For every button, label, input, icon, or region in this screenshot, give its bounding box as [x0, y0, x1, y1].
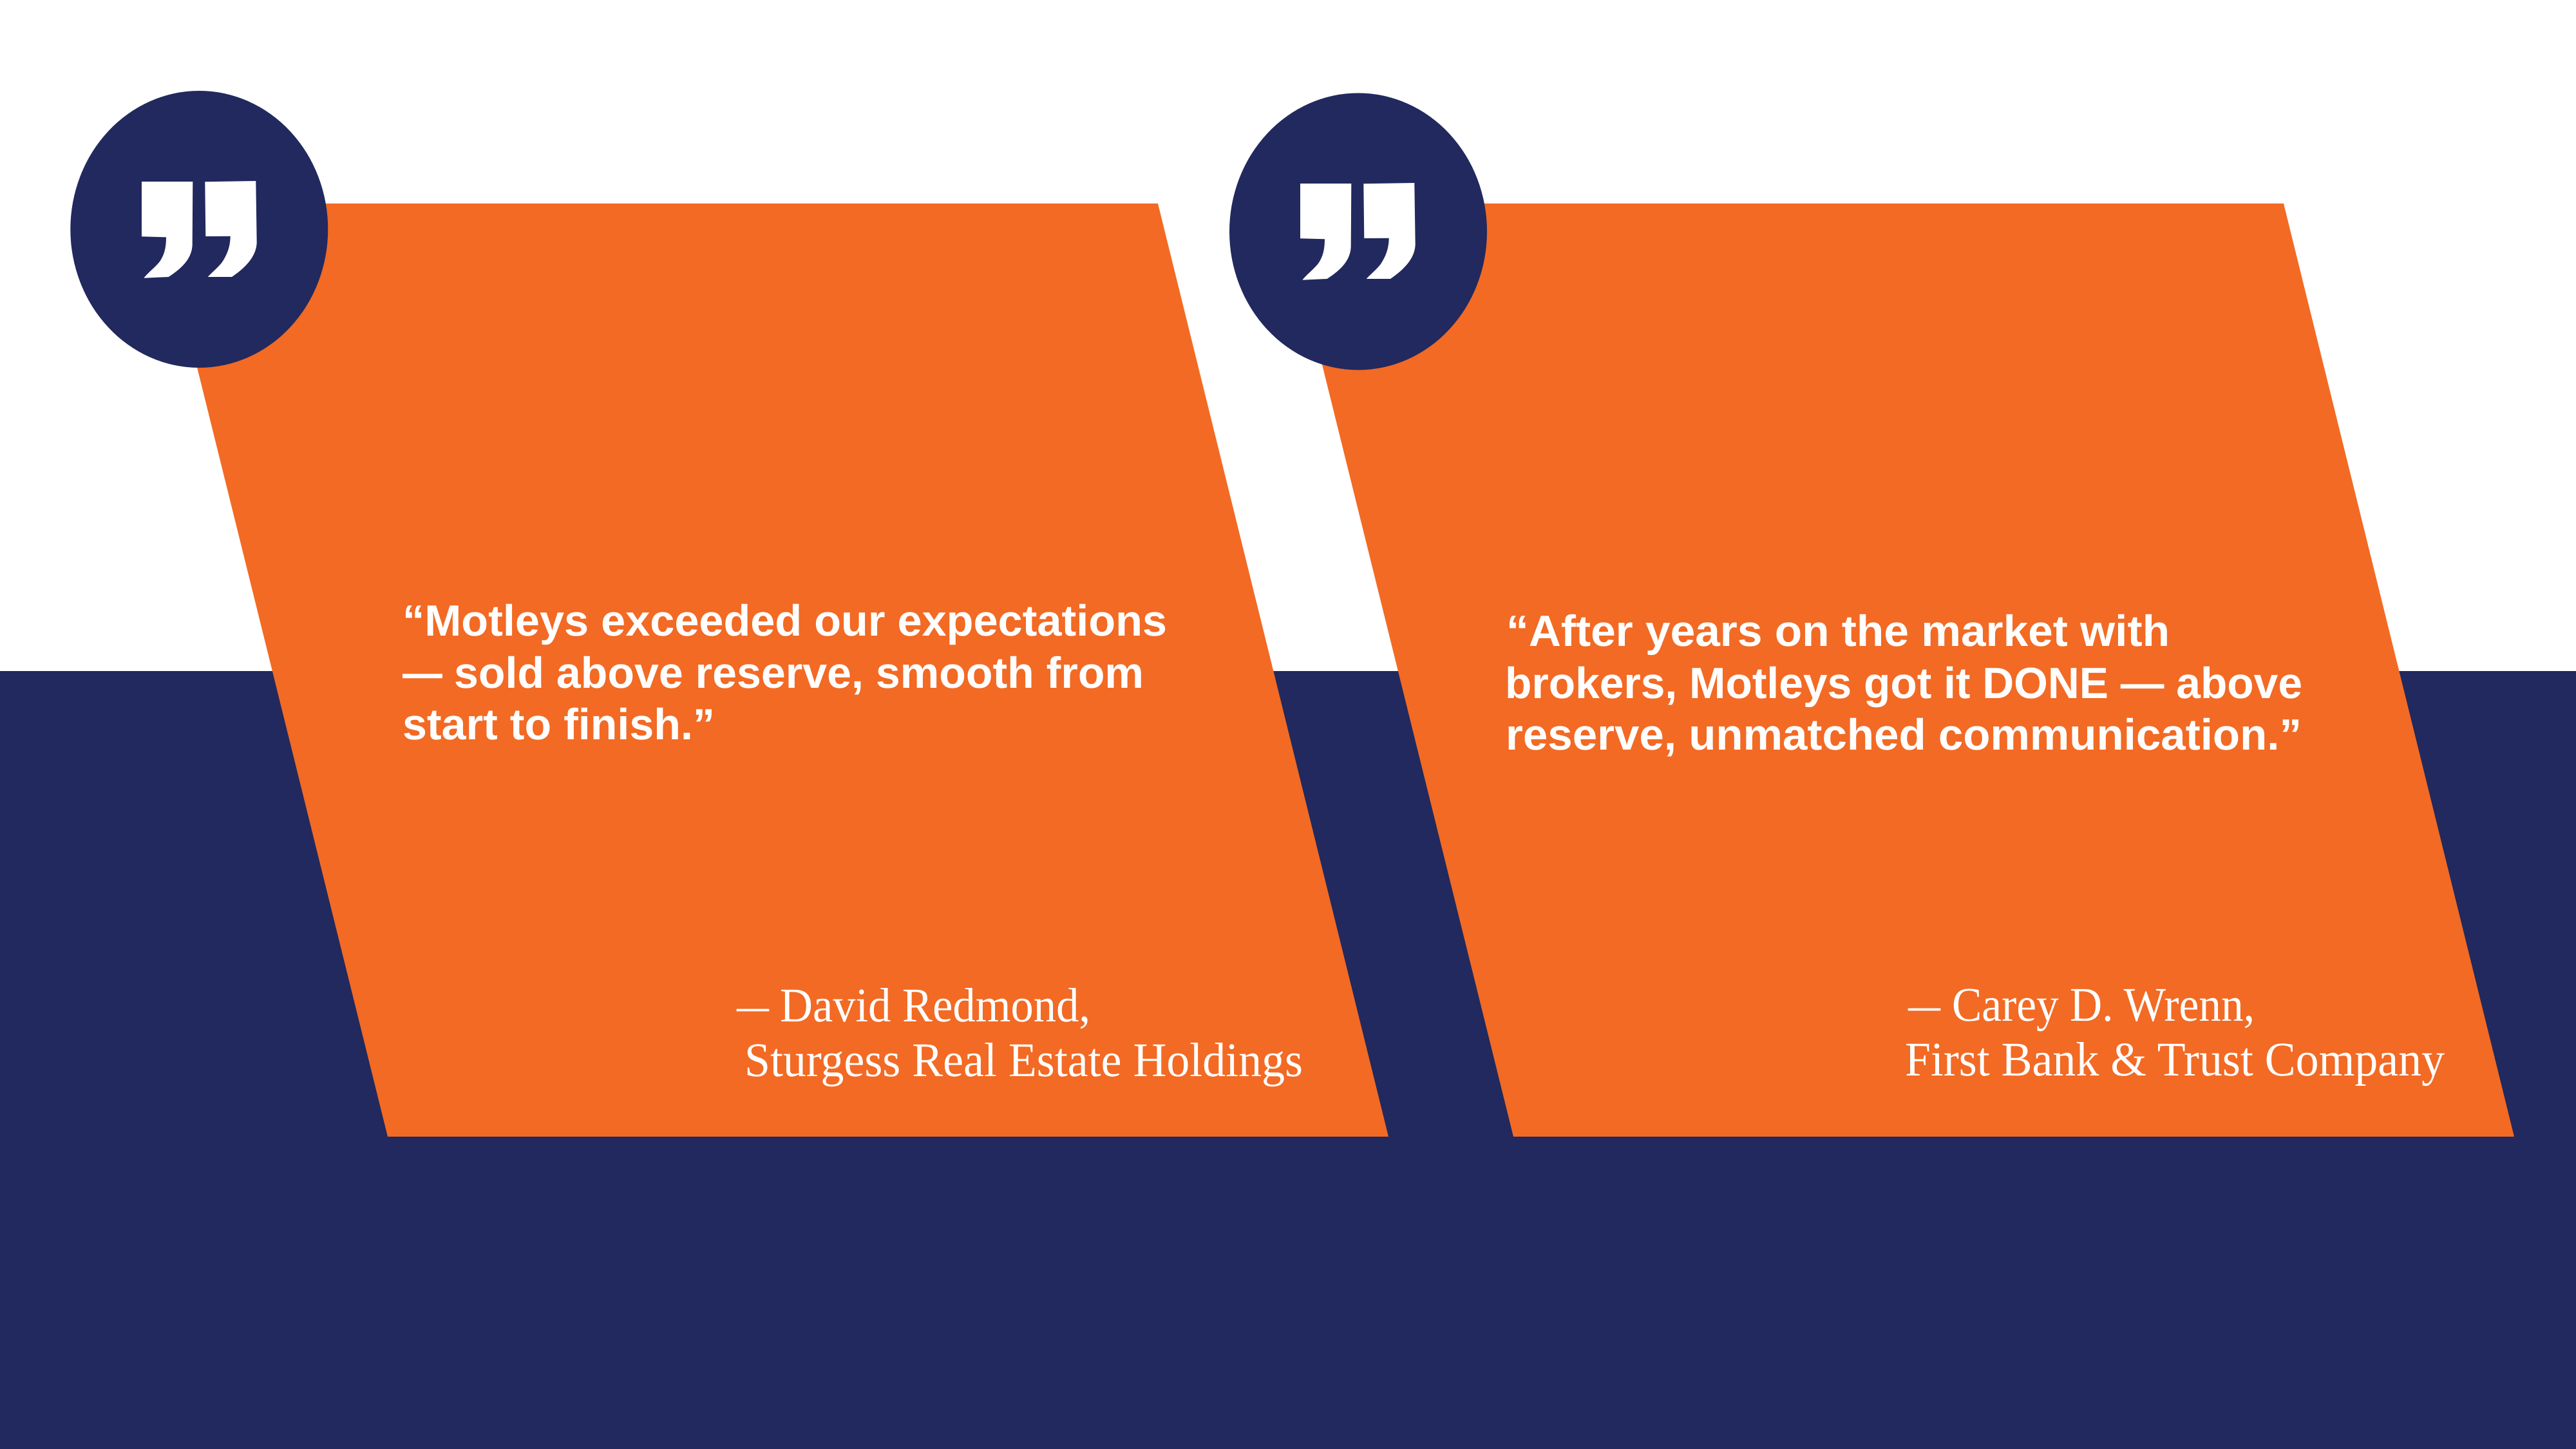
white upper background [0, 0, 2576, 671]
quote text: — [402, 649, 442, 697]
quote text: start to finish.” [402, 700, 715, 749]
orange parallelogram card [1282, 204, 2514, 1137]
quote text: “After years on the market with [1506, 607, 2170, 656]
navy oval [70, 91, 328, 368]
attribution: Carey D. Wrenn, [1952, 978, 2255, 1032]
quote text: reserve, unmatched communication.” [1506, 710, 2302, 759]
quote text: sold above reserve, smooth from [454, 649, 1144, 697]
orange parallelogram card [156, 204, 1388, 1137]
quotation mark glyph [142, 181, 257, 278]
panel: testimonial Carey D. Wrenn [1229, 93, 2514, 1137]
attribution [1905, 978, 2445, 1086]
attribution: Sturgess Real Estate Holdings [744, 1034, 1303, 1087]
navy lower background band [0, 671, 2576, 1449]
quote text: brokers, Motleys got it DONE — above [1505, 659, 2302, 708]
panel: testimonial David Redmond [70, 91, 1388, 1137]
quote text [402, 596, 1167, 749]
attribution: David Redmond, [780, 979, 1090, 1032]
attribution: — [1908, 978, 1941, 1032]
icon: quote badge [70, 91, 328, 368]
attribution: — [736, 979, 770, 1032]
icon: quote badge [1229, 93, 1487, 370]
quote text [1505, 607, 2302, 759]
quote text: “Motleys exceeded our expectations [402, 596, 1167, 645]
navy oval [1229, 93, 1487, 370]
attribution: First Bank & Trust Company [1905, 1033, 2445, 1086]
quotation mark glyph [1300, 183, 1416, 280]
attribution [736, 979, 1303, 1087]
